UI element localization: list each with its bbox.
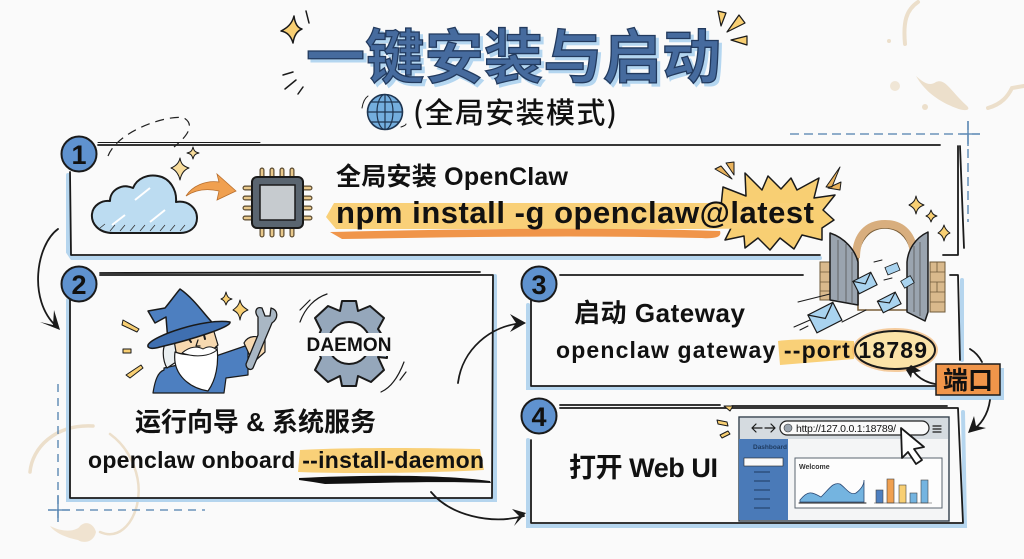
line chart: [799, 480, 866, 503]
heading: open Web UI: 打开 Web UI: [569, 453, 718, 483]
coffee stain: top right: [887, 2, 1024, 110]
sparkles near the gate: [909, 196, 950, 241]
command: openclaw onboard install-daemon: [88, 447, 491, 484]
starburst: [715, 162, 841, 250]
robe: [153, 345, 248, 393]
arrow: step 2 to step 3: [458, 314, 526, 383]
icon: chip: [245, 170, 310, 235]
callout: port label: [906, 361, 1004, 400]
coffee stain: bottom left: [30, 426, 139, 542]
heading: wizard and system service: 运行向导 & 系统服务: [135, 407, 376, 437]
command: openclaw onboard install-daemon: openclaw onboard --install-daemon: [88, 447, 484, 473]
bar chart: [874, 479, 932, 503]
icon: daemon gear: DAEMON: [306, 335, 392, 356]
welcome card: [795, 458, 942, 508]
title: 一键安装与启动: [306, 10, 721, 95]
sidebar: [739, 439, 788, 520]
callout: port label: 端口: [943, 361, 993, 397]
panel 3 border: [528, 275, 962, 388]
icon: wizard: [122, 289, 277, 393]
hat: [148, 289, 216, 342]
sidebar: Dashboard: [753, 444, 787, 451]
panel 3: start gateway: [522, 224, 962, 388]
accent marks by browser: [717, 406, 733, 438]
icon: daemon gear: [300, 294, 406, 392]
heading: start Gateway: 启动 Gateway: [574, 298, 746, 328]
step badge 3: 3: [531, 270, 547, 300]
step badge 2: 2: [71, 270, 87, 300]
welcome card: Welcome: [799, 464, 830, 471]
arrow: step 2 to step 4: [431, 492, 526, 526]
step badge 3: [522, 266, 556, 302]
browser window: [739, 417, 949, 521]
step badge 4: [522, 398, 556, 434]
step badge 1: 1: [71, 140, 87, 170]
heading: global install OpenClaw: 全局安装 OpenClaw: [336, 163, 569, 191]
cursor: [901, 428, 924, 464]
subtitle: (全局安装模式): [413, 90, 617, 132]
hair: [163, 338, 178, 368]
panel 4 border: [528, 405, 965, 526]
icon: gate with envelopes: [794, 224, 945, 333]
step badge 1: [62, 136, 96, 172]
beard: [175, 347, 218, 391]
panel 1: global install: [62, 117, 964, 258]
envelope: small: [885, 259, 915, 292]
command: openclaw gateway port 18789: [556, 328, 938, 372]
hand: [244, 337, 265, 360]
arrow: step 1 to step 2: [38, 229, 60, 330]
command: openclaw gateway port 18789: openclaw gateway --port 18789: [556, 337, 927, 363]
arrow: port label to step 4: [968, 349, 990, 433]
panel 2: wizard and daemon: [62, 266, 495, 500]
panel 2 border: [68, 272, 495, 500]
envelope: large: [808, 302, 842, 333]
step badge 2: [62, 266, 96, 302]
title sparkle and accent marks: [281, 11, 747, 94]
icon: globe: [362, 94, 406, 130]
icon: cloud: [92, 176, 197, 233]
wrench: [246, 308, 277, 369]
panel 4: open web UI: [522, 398, 965, 526]
panel 1 border: [68, 142, 964, 258]
dashed swoosh and sparkles: [108, 117, 199, 180]
highlighted command: npm install: npm install -g openclaw@latest: [336, 195, 814, 230]
browser window: http://127.0.0.1:18789/: [796, 423, 896, 435]
step badge 4: 4: [531, 402, 547, 432]
moustache: [182, 347, 217, 356]
envelope: lower: [877, 292, 901, 313]
envelope: middle: [853, 272, 877, 294]
arrow: cloud to chip: [186, 174, 236, 200]
face: [174, 325, 218, 358]
crop marks: dashed blue guides: [48, 121, 980, 522]
title: 一键安装与启动: [309, 13, 724, 98]
